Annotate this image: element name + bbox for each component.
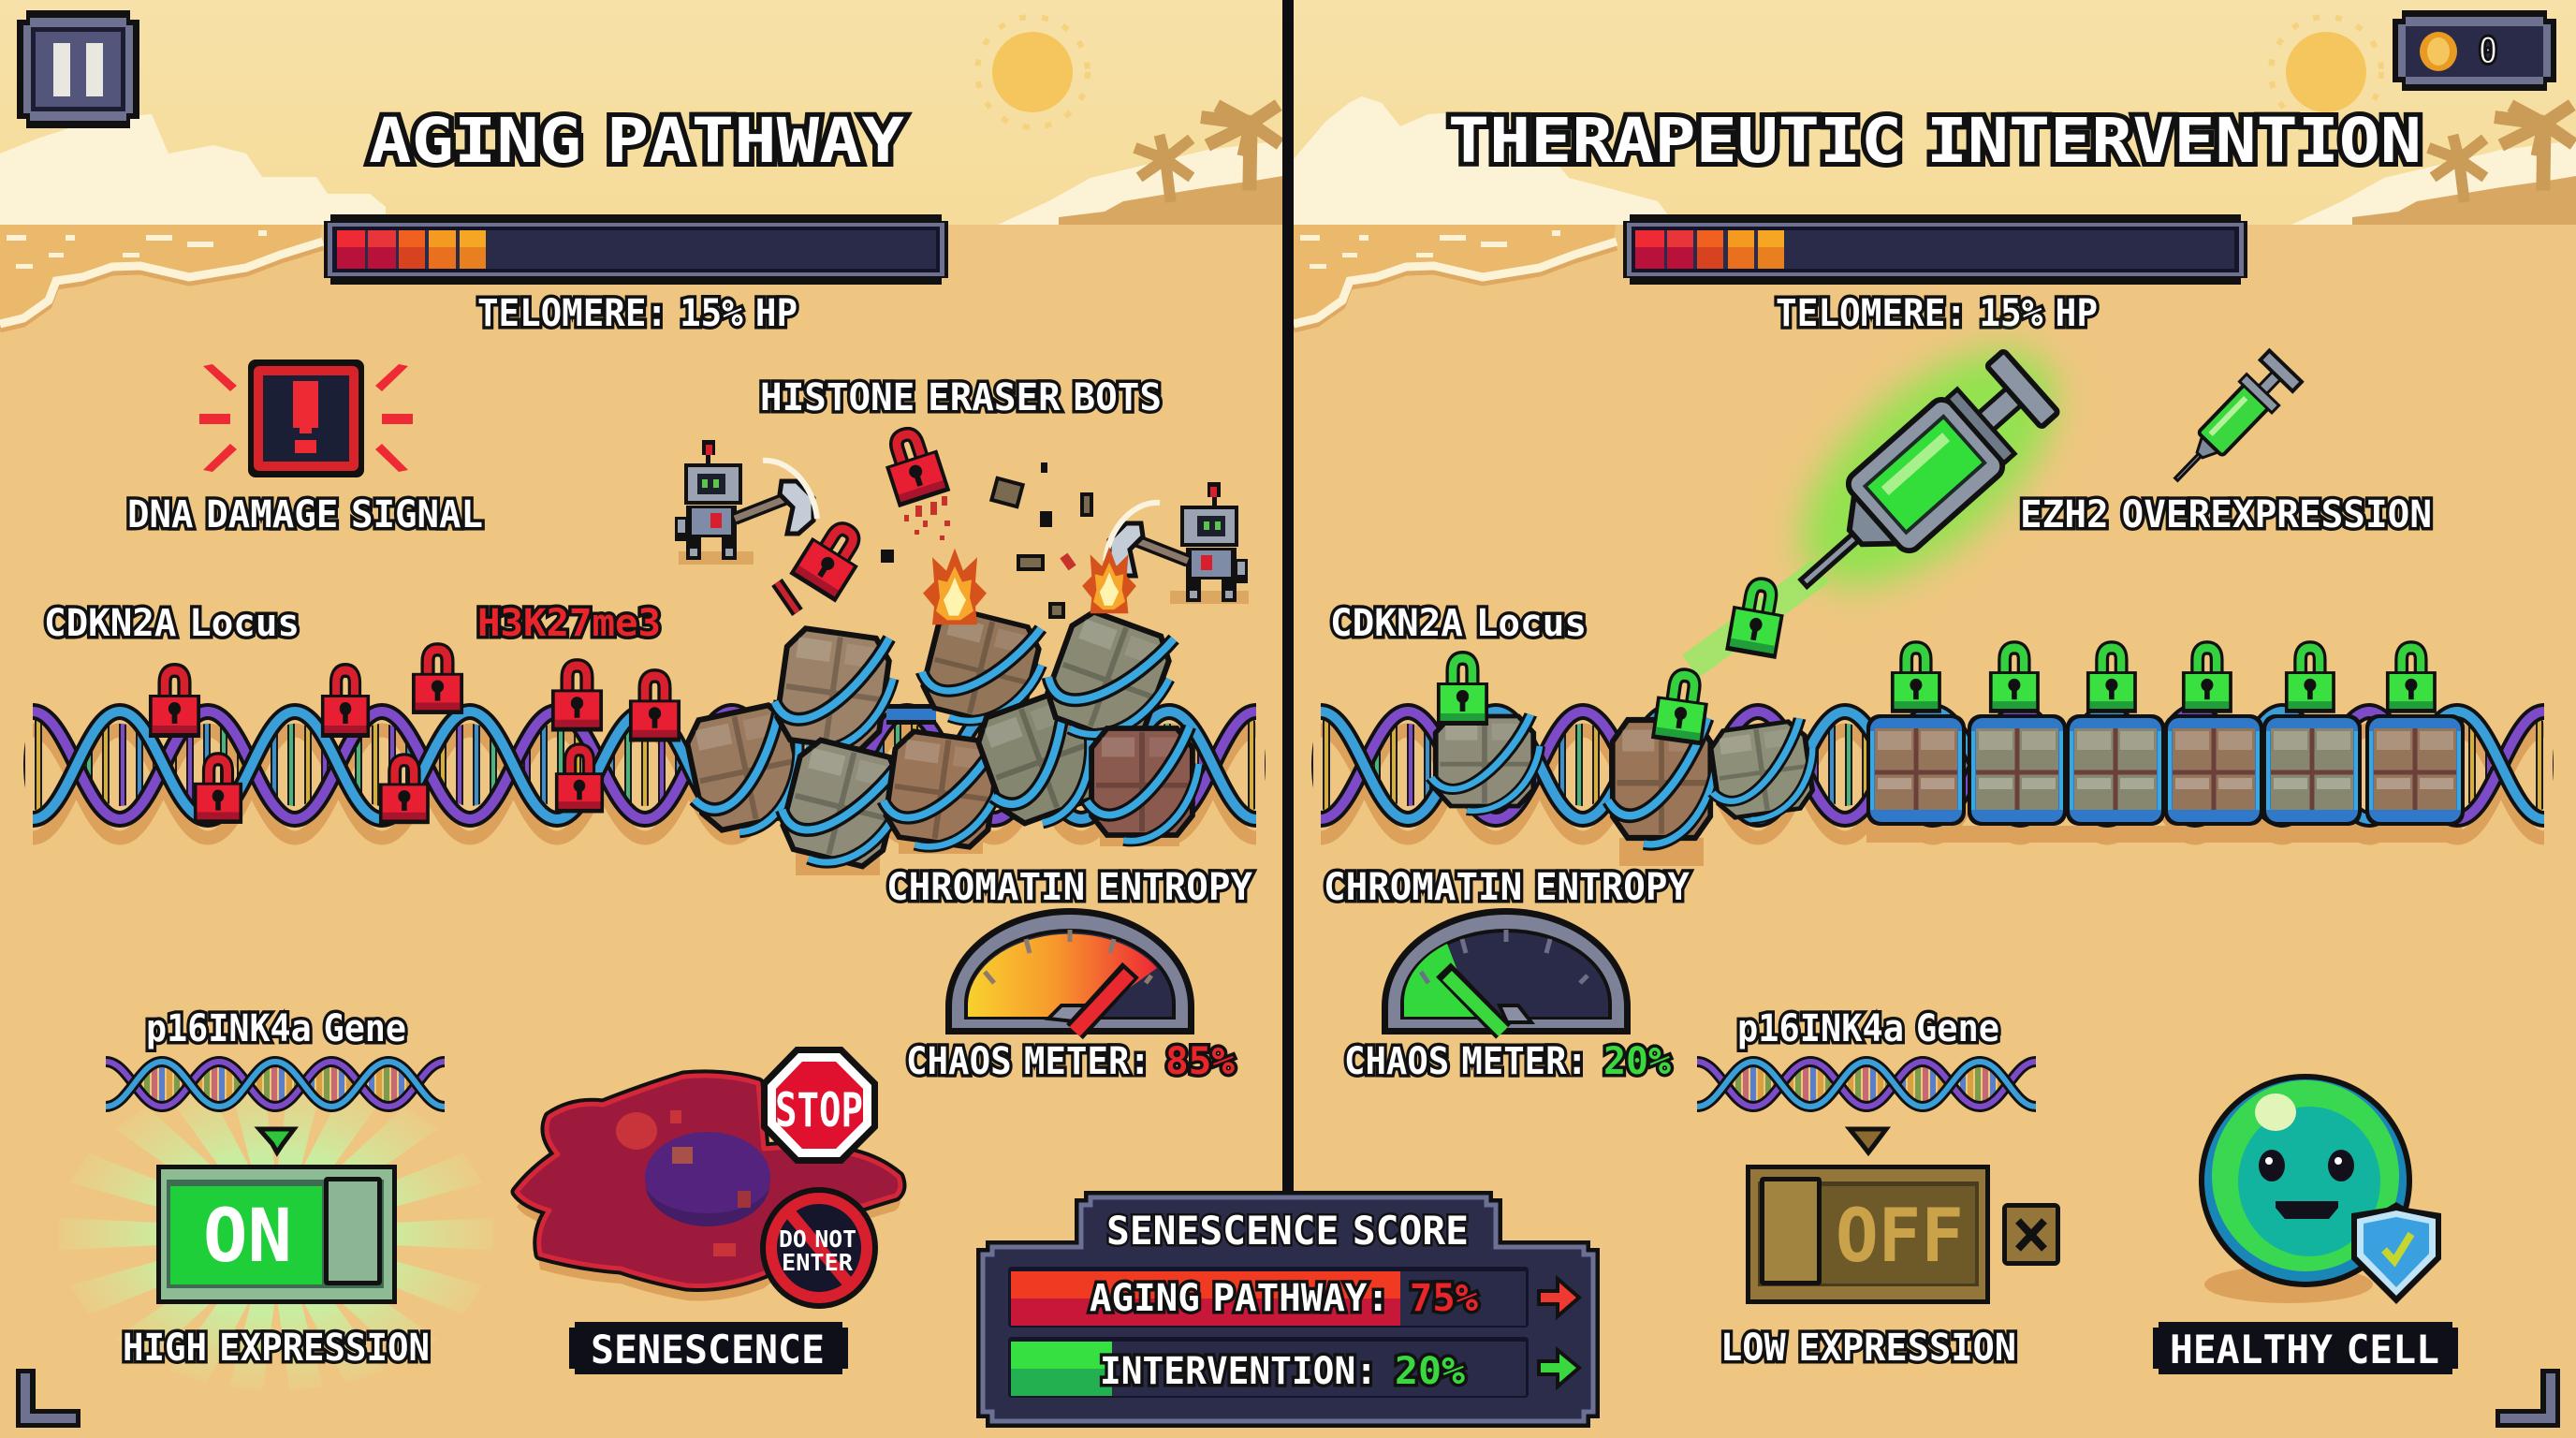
gauge: chaos meter 85%	[945, 908, 1194, 1034]
arrow down: green	[259, 1129, 294, 1152]
icon: large syringe with glow	[1762, 308, 2095, 628]
healthy cell	[2199, 1074, 2412, 1303]
score bar: intervention	[1008, 1337, 1529, 1398]
do not enter sign: ENTER	[782, 1249, 854, 1276]
cloud: right panel	[1294, 96, 1676, 225]
score bar: aging pathway: AGING PATHWAY:	[1090, 1277, 1389, 1320]
panel: aging pathway	[16, 10, 1266, 1428]
heading: senescence score: SENESCENCE SCORE	[1106, 1208, 1469, 1254]
gene DNA icon	[1697, 1060, 2036, 1108]
icon: DNA damage alert	[199, 360, 413, 477]
corner bracket left	[16, 1369, 80, 1428]
histone eraser bots scene	[675, 427, 1249, 624]
loose nucleosomes	[1431, 714, 1822, 844]
arrow: red	[1539, 1279, 1579, 1316]
label: high expression: HIGH EXPRESSION	[123, 1327, 430, 1370]
gauge: chaos meter 20%	[1382, 908, 1631, 1034]
label: EZH2 overexpression: EZH2 OVEREXPRESSION	[2020, 493, 2432, 536]
label: H3K27me3: H3K27me3	[477, 602, 661, 645]
arrow: green	[1539, 1350, 1579, 1387]
title: therapeutic intervention: THERAPEUTIC INTERVENTION	[1448, 105, 2422, 177]
H3K27me3 locks	[149, 650, 681, 824]
green beam from syringe	[1690, 571, 1821, 667]
label: chromatin entropy: CHROMATIN ENTROPY	[886, 866, 1252, 909]
icon: shield with check	[2351, 1202, 2441, 1304]
label: histone eraser bots: HISTONE ERASER BOTS	[760, 376, 1162, 419]
background: beach scene, left panel	[0, 0, 1282, 1438]
ON switch	[156, 1165, 397, 1304]
telomere health bar	[1623, 214, 2247, 285]
telomere health bar	[324, 214, 948, 285]
label: p16INK4a gene: p16INK4a Gene	[146, 1007, 406, 1050]
panel: therapeutic intervention	[1311, 10, 2560, 1428]
label: chaos meter 85%: CHAOS METER:	[906, 1040, 1150, 1083]
cloud: left panel	[0, 114, 386, 225]
center divider	[1282, 0, 1294, 1198]
coin counter: 0	[2478, 30, 2498, 73]
score bar: aging pathway: 75%	[1410, 1277, 1478, 1320]
OFF switch: OFF	[1836, 1195, 1964, 1279]
label box: healthy cell: HEALTHY CELL	[2170, 1327, 2439, 1372]
pause button	[17, 10, 139, 128]
label: CDKN2A locus: CDKN2A Locus	[1330, 602, 1587, 645]
icon: small syringe	[2160, 350, 2302, 495]
corner bracket right	[2496, 1369, 2560, 1428]
telomere label: TELOMERE: 15% HP	[477, 292, 798, 335]
stop sign: STOP	[775, 1083, 863, 1137]
nucleosome cluster	[678, 603, 1199, 878]
score bar: intervention: 20%	[1395, 1350, 1465, 1393]
glow rays behind ON switch	[59, 1078, 493, 1390]
do not enter sign: DO NOT	[779, 1225, 856, 1253]
OFF switch	[1746, 1165, 1990, 1304]
stop sign	[761, 1047, 878, 1164]
label: chaos meter 20%: CHAOS METER:	[1344, 1040, 1588, 1083]
label: p16INK4a gene: p16INK4a Gene	[1737, 1007, 1999, 1050]
panel: senescence score	[983, 1197, 1593, 1421]
coin counter	[2393, 10, 2556, 91]
telomere label: TELOMERE: 15% HP	[1776, 292, 2098, 335]
score bar: intervention: INTERVENTION:	[1100, 1350, 1377, 1393]
label: low expression: LOW EXPRESSION	[1720, 1327, 2016, 1370]
label: DNA damage signal: DNA DAMAGE SIGNAL	[127, 493, 483, 536]
label box: senescence: SENESCENCE	[591, 1327, 825, 1372]
title: aging pathway: AGING PATHWAY	[369, 105, 904, 177]
label: chaos meter 20%: 20%	[1603, 1040, 1671, 1083]
green locks	[1437, 580, 2437, 746]
ON switch: ON	[203, 1195, 292, 1279]
do not enter sign	[760, 1187, 878, 1309]
icon: x mark box	[2002, 1203, 2060, 1266]
senescent cell	[517, 1076, 900, 1300]
DNA helix with ordered nucleosomes	[1311, 580, 2554, 866]
label: chromatin entropy: CHROMATIN ENTROPY	[1324, 866, 1690, 909]
background: beach scene, right panel	[1294, 0, 2576, 1438]
DNA helix with scattered nucleosomes	[23, 603, 1266, 878]
gene DNA icon	[106, 1060, 445, 1108]
arrow down: muted	[1850, 1129, 1886, 1152]
label: chaos meter 85%: 85%	[1165, 1040, 1235, 1083]
label: CDKN2A locus: CDKN2A Locus	[44, 602, 300, 645]
ordered nucleosome array	[1866, 714, 2465, 826]
score bar: aging pathway	[1008, 1267, 1529, 1328]
